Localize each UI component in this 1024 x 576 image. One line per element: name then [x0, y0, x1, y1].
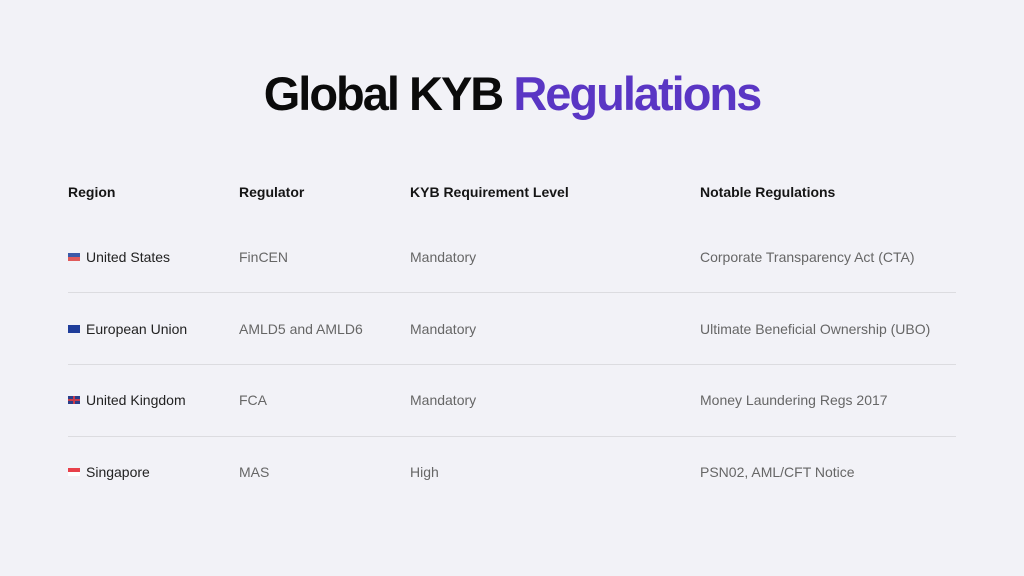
row: US regulator: FinCEN: [239, 249, 288, 265]
header: notable: Notable Regulations: [700, 184, 835, 200]
row: EU level: Mandatory: [410, 321, 476, 337]
row: SG notable: PSN02, AML/CFT Notice: [700, 464, 855, 480]
title: Global KYB Regulations: [264, 67, 760, 120]
row: UK level: Mandatory: [410, 392, 476, 408]
row: SG level: High: [410, 464, 439, 480]
row: EU notable: Ultimate Beneficial Ownership (UBO): [700, 321, 930, 337]
row: SG region: Singapore: [86, 464, 150, 480]
row: EU regulator: AMLD5 and AMLD6: [239, 321, 363, 337]
row: US region: United States: [86, 249, 170, 265]
row: SG regulator: MAS: [239, 464, 269, 480]
header: regulator: Regulator: [239, 184, 304, 200]
row: EU region: European Union: [86, 321, 187, 337]
row: UK notable: Money Laundering Regs 2017: [700, 392, 888, 408]
row: US level: Mandatory: [410, 249, 476, 265]
row: US notable: Corporate Transparency Act (CTA): [700, 249, 914, 265]
header: region: Region: [68, 184, 115, 200]
row: UK regulator: FCA: [239, 392, 267, 408]
header: level: KYB Requirement Level: [410, 184, 569, 200]
row: UK region: United Kingdom: [86, 392, 186, 408]
